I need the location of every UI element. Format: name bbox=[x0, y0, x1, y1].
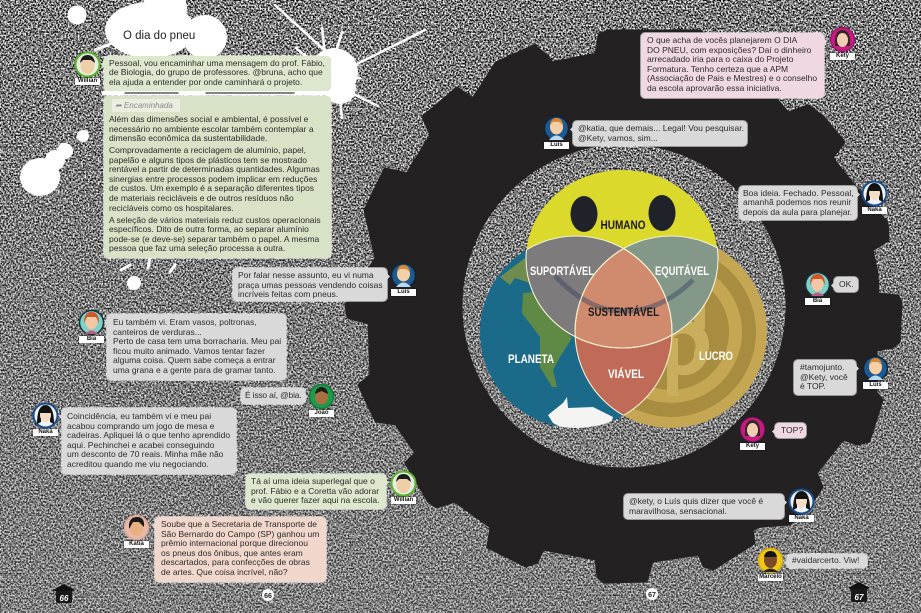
venn labels: VIÁVEL bbox=[608, 366, 644, 381]
title: O dia do pneu bbox=[123, 30, 195, 42]
bubble: Luís katia bbox=[573, 121, 747, 146]
bubble: Kátia: prêmio internacional porque direcionou bbox=[161, 538, 308, 548]
bubble: Kátia: Soube que a Secretaria de Transporte de bbox=[161, 519, 317, 529]
bubble: forwarded message: dimensão econômica da sustentabilidade. Comprovadamente a reciclagem de alumínio, papel, bbox=[109, 133, 306, 155]
bubble: Naka coincidence bbox=[62, 408, 236, 474]
avatar: Kety 1 bbox=[829, 27, 856, 61]
bubble: Willian intro: Pessoal, vou encaminhar uma mensagem do prof. Fábio, bbox=[109, 58, 325, 68]
bubble: Naka coincidence: um desconto de 70 reais. Minha mãe não bbox=[67, 449, 223, 459]
bubble: Kátia: descartados, para confecções de obras bbox=[161, 557, 310, 567]
page marker 66 with cap: 66 bbox=[60, 594, 69, 603]
bubble: Luís pneus bbox=[233, 268, 387, 301]
avatar: Kety 2: Kety bbox=[746, 443, 759, 449]
bubble: Willian intro: ela ajuda a entender por onde caminhará o projeto. bbox=[109, 77, 302, 87]
page number circle 67 bbox=[646, 588, 658, 600]
bubble: Luís tamojunto bbox=[794, 360, 856, 395]
bubble: Naka boa ideia bbox=[739, 186, 857, 220]
page number circle 66 bbox=[262, 589, 274, 601]
bubble: Luís katia: @Kety, vamos, sim... bbox=[578, 133, 658, 143]
bubble: Bia: uma grana e a gente para de gramar tanto. bbox=[113, 365, 276, 375]
page marker 67 with cap: 67 bbox=[855, 593, 864, 602]
forwarded tag: ➦ Encaminhada bbox=[115, 101, 173, 110]
bubble: Kátia: São Bernardo do Campo (SP) ganhou um bbox=[161, 529, 319, 539]
avatar: Luís 1: Luís bbox=[397, 289, 410, 295]
avatar: Kátia bbox=[123, 514, 150, 549]
avatar: Kety 2 bbox=[740, 417, 766, 450]
bubble: Luís pneus: incríveis feitas com pneus. bbox=[238, 289, 338, 299]
bubble: forwarded message: Além das dimensões social e ambiental, é possível e bbox=[109, 114, 308, 124]
avatar: Naka 1 bbox=[32, 402, 59, 437]
bubble: forwarded message: de materiais recicláveis e de outros resíduos não bbox=[109, 193, 294, 203]
avatar: Willian 1 bbox=[74, 52, 101, 86]
avatar: João bbox=[308, 384, 335, 418]
venn labels: SUSTENTÁVEL bbox=[588, 304, 659, 319]
bubble: forwarded message: específicos. Dito de outra forma, ao separar alumínio bbox=[109, 224, 309, 234]
bubble: Kety TOP bbox=[775, 423, 806, 438]
venn labels: PLANETA bbox=[508, 352, 554, 366]
avatar: Luís 1 bbox=[390, 262, 416, 296]
bubble: Willian intro: de Biologia, do grupo de professores. @bruna, acho que bbox=[109, 67, 323, 77]
avatar: Marcelo bbox=[757, 548, 784, 582]
bubble: Kety proposal: Formatura. Tenho certeza que a APM bbox=[647, 64, 788, 74]
circle: planeta (earth) bbox=[480, 250, 624, 428]
bubble: forwarded message: recicláveis como os hospitalares. A seleção de vários materiais reduz custos operacionais bbox=[109, 203, 321, 225]
bubble: Kety proposal: O que acha de vocês planejarem O DIA bbox=[647, 35, 797, 45]
bubble: Luís tamojunto: #tamojunto. bbox=[800, 362, 844, 372]
venn labels: EQUITÁVEL bbox=[655, 263, 709, 278]
page marker 66 with cap bbox=[53, 584, 75, 603]
avatar: Bia 2: Bia bbox=[813, 298, 822, 304]
bubble: Kátia: os pneus dos ônibus, que antes eram bbox=[161, 548, 303, 558]
bubble: Bia bbox=[107, 314, 286, 380]
bubble: forwarded message: pode-se (e deve-se) separar também o papel. A mesma bbox=[109, 234, 319, 244]
white paint splash bbox=[20, 0, 425, 290]
bubble: Naka coincidence: acabou comprando um jogo de mesa e bbox=[67, 421, 214, 431]
bubble: João: É isso aí, @bia. bbox=[245, 390, 301, 400]
bubble: Luís pneus: Por falar nesse assunto, eu vi numa bbox=[238, 270, 374, 280]
avatar: Marcelo: Marcelo bbox=[759, 574, 782, 580]
bubble: Naka kety: maravilhosa, sensacional. bbox=[629, 506, 727, 516]
avatar: Bia 1: Bia bbox=[87, 336, 96, 342]
circle: humano (smiley) bbox=[526, 170, 718, 348]
avatar: Naka 3: Naka bbox=[794, 515, 809, 521]
bubble: Willian reply: e vão querer fazer aqui na escola. bbox=[251, 495, 380, 505]
bubble: forwarded message: pessoa que faz uma seleção processa a outra. bbox=[109, 243, 285, 253]
bubble: Kety proposal: (Associação de Pais e Mestres) e o conselho bbox=[647, 73, 817, 83]
bubble: Naka coincidence: acreditou quando me viu negociando. bbox=[67, 459, 209, 469]
bubble: Naka kety: @kety, o Luís quis dizer que você é bbox=[629, 496, 763, 506]
circle: lucro (coin) bbox=[575, 236, 767, 428]
page marker 67 with cap bbox=[848, 582, 870, 602]
avatar: Naka 3 bbox=[788, 488, 815, 523]
avatar: Luís 2 bbox=[544, 116, 570, 150]
avatar: Willian 2: Willian bbox=[394, 497, 413, 503]
bubble: Luís tamojunto: é TOP. bbox=[800, 381, 826, 391]
avatar: João: João bbox=[314, 410, 328, 416]
bubble: Naka boa ideia: amanhã podemos nos reunir bbox=[743, 197, 851, 207]
bubble: Willian reply: prof. Fábio e a Coretta vão adorar bbox=[251, 486, 379, 496]
bubble: Marcelo: #vaidarcerto. Viw! bbox=[792, 555, 859, 565]
avatar: Bia 2 bbox=[804, 272, 830, 306]
bubble: Marcelo bbox=[787, 554, 867, 568]
avatar: Bia 1 bbox=[78, 310, 105, 344]
venn labels: SUPORTÁVEL bbox=[530, 263, 594, 278]
bubble: Willian reply: Tá aí uma ideia superlegal que o bbox=[251, 476, 375, 486]
avatar: Luís 2: Luís bbox=[550, 142, 563, 148]
bubble: forwarded message: rentável a partir de determinadas quantidades. Algumas bbox=[109, 164, 320, 174]
bubble: forwarded message: necessário no ambiente escolar também contemplar a bbox=[109, 124, 314, 134]
bubble: Bia OK: OK. bbox=[839, 279, 854, 289]
venn labels: LUCRO bbox=[699, 349, 733, 363]
bubble: Luís tamojunto: @Kety, você bbox=[800, 372, 848, 382]
bubble: Naka coincidence: Coincidência, eu também vi e meu pai bbox=[67, 411, 211, 421]
bubble: forwarded message: de custos. Um exemplo é a separação diferentes tipos bbox=[109, 183, 314, 193]
bubble: forwarded message: sinergias entre processos podem implicar em reduções bbox=[109, 174, 317, 184]
avatar: Naka 2: Naka bbox=[867, 207, 882, 213]
bubble: Bia: ficou muito animado. Vamos tentar fazer bbox=[113, 346, 265, 356]
bubble: Naka boa ideia: depois da aula para planejar. bbox=[743, 207, 852, 217]
bubble: Kety proposal: DO PNEU, com exposições? Daí o dinheiro bbox=[647, 45, 811, 55]
bubble: Bia: Perto de casa tem uma borracharia. Meu pai bbox=[113, 336, 281, 346]
bubble: Bia: Eu também vi. Eram vasos, poltronas, bbox=[113, 317, 257, 327]
bubble: Kety proposal: arrecadado iria para o caixa do Projeto bbox=[647, 54, 793, 64]
avatar: Willian 1: Willian bbox=[78, 78, 97, 84]
page number circle 67: 67 bbox=[648, 592, 656, 599]
bubble: Bia OK bbox=[834, 277, 858, 292]
avatar: Kety 1: Kety bbox=[836, 53, 849, 59]
avatar: Willian 2 bbox=[390, 470, 417, 505]
bubble: Kátia bbox=[155, 517, 326, 582]
avatar: Kátia: Kátia bbox=[129, 541, 144, 547]
bubble: forwarded message bbox=[104, 96, 331, 258]
venn intersections bbox=[525, 236, 719, 416]
bubble: Kety TOP: TOP? bbox=[781, 425, 803, 435]
bubble: Kety proposal bbox=[641, 33, 824, 98]
venn labels bbox=[508, 218, 733, 381]
avatar: Naka 1: Naka bbox=[38, 429, 53, 435]
black gear bbox=[346, 31, 901, 582]
bubble: Luís pneus: praça umas pessoas vendendo coisas bbox=[238, 280, 383, 290]
bubble: forwarded message: papelão e alguns tipos de plásticos tem se mostrado bbox=[109, 155, 307, 165]
page number circle 66: 66 bbox=[264, 593, 272, 600]
venn labels: HUMANO bbox=[600, 218, 646, 232]
bubble: Bia: canteiros de verduras... bbox=[113, 327, 202, 337]
bubble: Luís katia: @katia, que demais... Legal! Vou pesquisar. bbox=[578, 123, 744, 133]
bubble: João bbox=[241, 388, 305, 404]
bubble: Naka coincidence: aqui. Pechinchei e acabei conseguindo bbox=[67, 440, 214, 450]
forwarded tag bbox=[112, 99, 180, 112]
bubble: Kátia: de artes. Que coisa incrível, não? bbox=[161, 567, 288, 577]
bubble: Naka kety bbox=[624, 494, 784, 519]
bubble: Naka boa ideia: Boa ideia. Fechado. Pessoal, bbox=[743, 188, 854, 198]
avatar: Luís 3: Luís bbox=[869, 382, 882, 388]
bubble: Willian intro bbox=[104, 56, 331, 91]
bubble: Bia: alguma coisa. Quem sabe começa a entrar bbox=[113, 355, 276, 365]
avatar: Naka 2 bbox=[862, 180, 888, 215]
bubble: Naka coincidence: cadeiras. Apliquei lá o que tenho aprendido bbox=[67, 430, 230, 440]
avatar: Luís 3 bbox=[862, 356, 889, 390]
bubble: Kety proposal: da escola aprovarão essa iniciativa. bbox=[647, 83, 782, 93]
bubble: Willian reply bbox=[246, 474, 386, 509]
